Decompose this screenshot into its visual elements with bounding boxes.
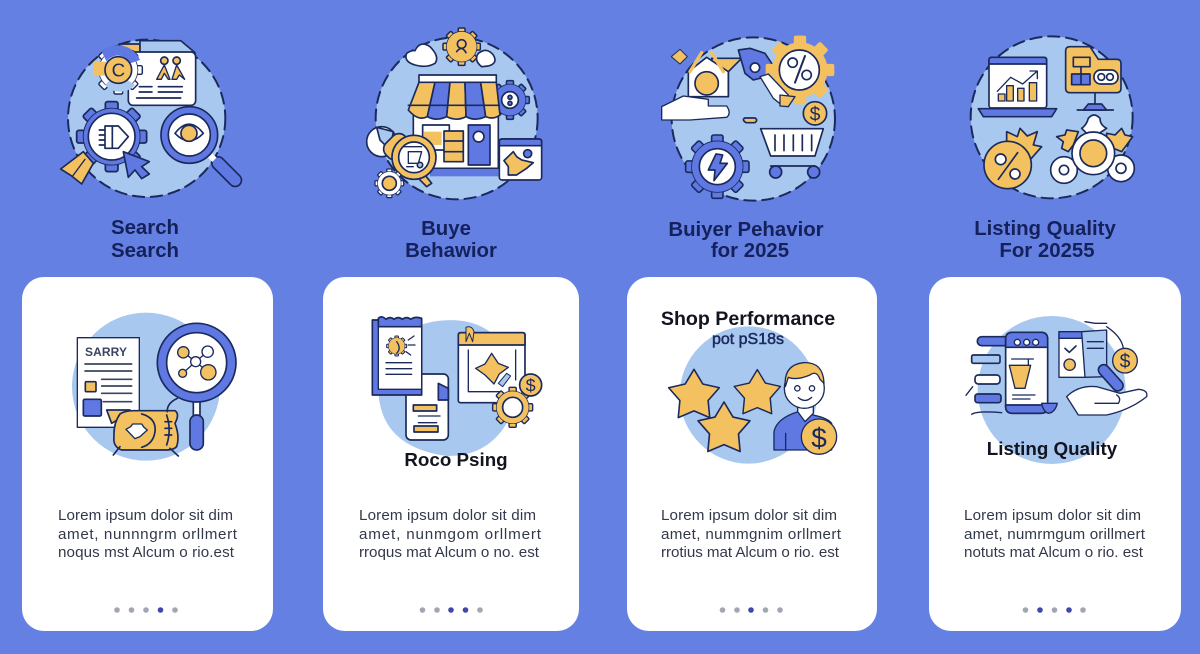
magnifier [157,323,236,450]
dollar coin: $ [810,105,821,126]
dashed circle [672,37,835,201]
card background [627,277,877,631]
clouds [406,44,495,67]
yellow gear [443,28,480,65]
heading: listing quality: For 20255 [999,240,1095,262]
summary document: SARRY [85,345,127,359]
hand [662,96,729,120]
icon: store illustration [367,28,542,199]
blue blob [978,316,1126,464]
side pills [966,337,1009,414]
icon: search illustration [61,40,244,197]
pagination dots [420,607,483,613]
wrench [738,48,772,80]
heading: listing quality: Listing Quality [974,218,1116,240]
body text: notuts mat Alcum o rio. est [964,544,1144,561]
heading: search: Search [111,240,179,262]
illustration heading: Shop Performance [661,308,835,330]
hand with capsule [1067,362,1147,415]
card background [22,277,273,631]
percent gear [766,36,834,104]
panel: card 4 [929,277,1181,631]
rating stars [669,369,780,451]
body text: amet, nunnngrm orllmert [58,526,238,543]
illustration: receipts and window [372,317,542,456]
receipt [372,317,422,395]
dollar coin: $ [1120,352,1131,373]
summary document [77,338,139,427]
tag [61,152,93,184]
globe [367,127,397,157]
percent badge [984,128,1042,189]
window card [458,327,525,403]
icon: cart and gears illustration [662,36,835,201]
phone [1006,332,1057,413]
body text: amet, nummgnim orllmert [661,526,842,543]
blue blob [378,320,514,456]
dollar coin [803,102,827,126]
panel: card 3 [627,277,877,631]
dashed circle [68,40,225,197]
body text: Lorem ipsum dolor sit dim [58,507,233,524]
blue blob [680,326,817,464]
dollar coin [801,419,837,454]
yellow gear [493,387,533,427]
body text: Lorem ipsum dolor sit dim [661,507,837,524]
gears and leaves [1051,115,1134,183]
dollar coin [520,374,542,396]
illustration subheading: pot pS18s [712,331,784,348]
eye magnifier [161,107,244,189]
document [406,374,448,440]
heading: buyer behavior: Behawior [405,240,497,262]
body text: amet, numrmgum orillmert [964,526,1146,543]
lightning gear [686,135,749,198]
ticket [107,398,178,456]
storefront [408,75,500,176]
customer [774,363,832,450]
blue blob [72,313,220,461]
folder on stand [1066,47,1121,110]
illustration: summary and magnifier [72,313,236,461]
white gear [375,169,404,198]
pagination dots [114,607,178,613]
diamond [671,49,687,64]
pagination dots [720,607,783,613]
panel: card 2 [323,277,579,631]
pagination dots [1023,607,1086,613]
heading: buyer pehavior: for 2025 [711,240,789,262]
magnifier with cart [380,130,436,187]
body text: rroqus mat Alcum o no. est [359,544,540,561]
body text: Lorem ipsum dolor sit dim [964,507,1141,524]
copyright gear: C [112,60,125,81]
process gear [77,102,147,172]
heading: search: Search [111,217,179,239]
dollar coin [1113,348,1137,373]
illustration: phone listing and hand [966,316,1147,464]
body text: rrotius mat Alcum o rio. est [661,544,840,561]
heading: buyer behavior: Buye [421,218,471,240]
key [760,74,795,107]
copyright gear [93,45,142,94]
card background [929,277,1181,631]
dashed circle [971,36,1133,198]
dashed circle [376,37,538,199]
body text: noqus mst Alcum o rio.est [58,544,235,561]
illustration caption: Listing Quality [987,438,1118,459]
body text: amet, nunmgom orllmert [359,526,542,543]
blue gear [491,81,529,119]
panel: card 1 [22,277,273,631]
side document [1059,322,1123,377]
window card [499,139,542,180]
card background [323,277,579,631]
document with people [119,41,196,105]
laptop chart [978,57,1057,117]
illustration: stars and customer [669,326,837,464]
box [688,53,742,97]
shopping cart [743,118,823,178]
cursor arrow [123,152,149,179]
body text: Lorem ipsum dolor sit dim [359,507,536,524]
heading: buyer pehavior: Buiyer Pehavior [668,219,824,241]
icon: listing quality illustration [971,36,1134,198]
dollar coin: $ [811,422,827,453]
illustration caption: Roco Psing [404,449,508,470]
dollar coin: $ [526,376,536,396]
